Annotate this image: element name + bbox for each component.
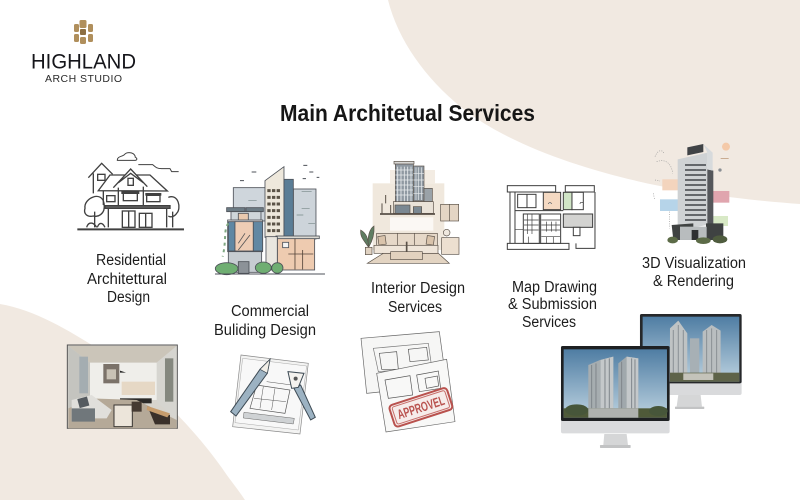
icon: interior design xyxy=(361,161,459,263)
icon: logo mark xyxy=(74,20,93,44)
icon: front monitor with rendering xyxy=(561,346,670,448)
label: residential: Architettural xyxy=(87,271,167,288)
label: map drawing: & Submission xyxy=(508,296,597,313)
label: interior design: Services xyxy=(388,299,442,316)
label: interior design: Interior Design xyxy=(371,280,465,297)
label: residential: Design xyxy=(107,289,150,306)
icon: drafting pencils on blueprint xyxy=(231,355,315,434)
logo subtitle: ARCH STUDIO xyxy=(45,73,122,85)
icon: plans with approval stamp xyxy=(361,332,455,432)
label: 3D visualization xyxy=(642,255,746,290)
label: commercial xyxy=(214,303,316,339)
icon: commercial building xyxy=(215,165,325,275)
label: 3D visualization: 3D Visualization xyxy=(642,255,746,272)
image: living room interior photo xyxy=(67,345,177,428)
background blob: bottom left xyxy=(0,304,245,500)
icon: back monitor with rendering xyxy=(640,314,742,409)
logo xyxy=(31,20,136,85)
stamp text: APPROVEL xyxy=(395,393,446,422)
label: commercial: Buliding Design xyxy=(214,322,316,339)
icon: residential house line drawing xyxy=(77,153,184,229)
logo wordmark: HIGHLAND xyxy=(31,50,136,74)
label: interior design xyxy=(371,280,465,316)
label: map drawing xyxy=(508,279,597,331)
label: residential xyxy=(87,252,167,306)
label: residential: Residential xyxy=(96,252,166,269)
label: 3D visualization: & Rendering xyxy=(653,273,734,290)
title: Main Architetual Services xyxy=(280,100,535,126)
background blob: top right xyxy=(388,0,800,204)
icon: 3D tower with colored panels xyxy=(653,143,730,244)
label: commercial: Commercial xyxy=(231,303,309,320)
icon: floor plan xyxy=(507,186,595,249)
label: map drawing: Services xyxy=(522,314,576,331)
label: map drawing: Map Drawing xyxy=(512,279,597,296)
